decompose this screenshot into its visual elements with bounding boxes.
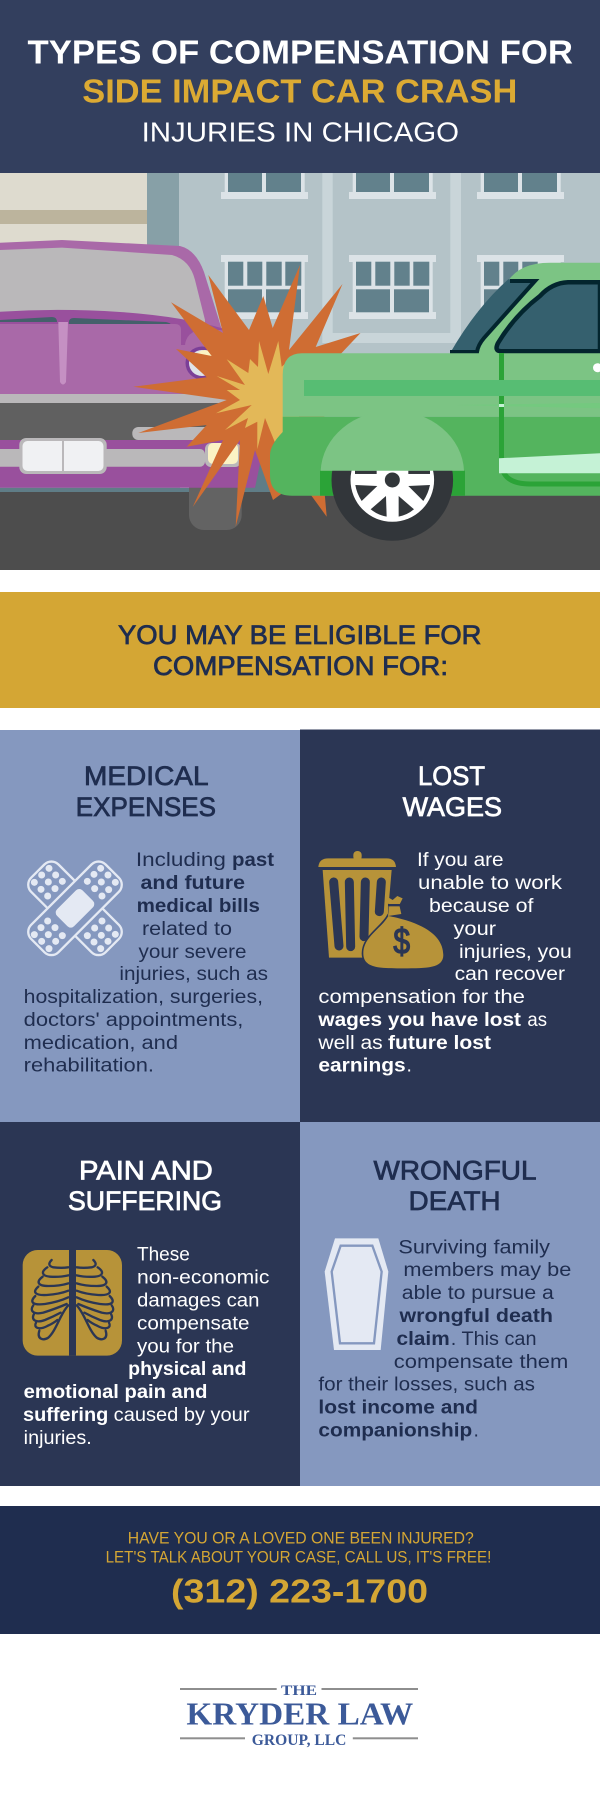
text: wrongful death: lost income and <box>318 1398 478 1419</box>
icon: rib cage <box>23 1250 122 1356</box>
building background <box>0 173 600 570</box>
call to action panel <box>0 1506 600 1634</box>
banner: you may be eligible: YOU MAY BE ELIGIBLE FOR <box>118 620 482 650</box>
heading: medical expenses: EXPENSES <box>76 792 216 822</box>
icon: crossed bandages <box>24 857 126 959</box>
logo: the kryder law group: THE <box>281 1683 317 1699</box>
text: lost wages: your <box>454 919 497 940</box>
text: medical expenses: Including <box>136 850 226 871</box>
text: medical expenses <box>24 850 275 1076</box>
text: lost wages: well as <box>317 1033 383 1054</box>
text: lost wages: injuries, you <box>459 942 572 963</box>
text: wrongful death: claim <box>396 1329 450 1350</box>
purple car <box>0 240 290 530</box>
banner: you may be eligible <box>0 592 600 708</box>
text: lost wages: wages you have lost <box>317 1010 522 1031</box>
icon: trash can and money bag: $ <box>393 920 410 961</box>
text: medical expenses: past <box>232 850 275 871</box>
text: lost wages: because of <box>429 896 534 917</box>
text: pain and suffering: caused by your <box>114 1405 250 1426</box>
text: medical expenses: medication, and <box>24 1033 178 1054</box>
text: lost wages: . <box>406 1056 412 1076</box>
icon: coffin <box>325 1238 388 1350</box>
header panel <box>0 0 600 173</box>
text: wrongful death: members may be <box>403 1260 571 1281</box>
title <box>28 34 573 148</box>
text: wrongful death: Surviving family <box>398 1237 550 1258</box>
text: pain and suffering: you for the <box>137 1336 234 1357</box>
text: lost wages: as <box>527 1010 547 1031</box>
heading: medical expenses <box>76 761 216 822</box>
title: SIDE IMPACT CAR CRASH <box>82 72 517 110</box>
heading: lost wages: LOST <box>418 761 485 791</box>
text: pain and suffering: emotional pain and <box>24 1382 207 1403</box>
text: lost wages: future lost <box>388 1033 492 1054</box>
text: pain and suffering: compensate <box>137 1313 250 1334</box>
text: wrongful death: for their losses, such as <box>318 1375 535 1396</box>
title: INJURIES IN CHICAGO <box>142 117 459 148</box>
icon: trash can and money bag <box>318 851 443 968</box>
text: wrongful death <box>318 1237 571 1442</box>
text: medical expenses: medical bills <box>137 896 260 917</box>
text: medical expenses: injuries, such as <box>119 964 268 985</box>
wheel <box>320 419 465 541</box>
panel: wrongful death <box>300 1122 600 1486</box>
panel: lost wages <box>300 730 600 1122</box>
text: wrongful death: . This can <box>451 1329 536 1350</box>
text: lost wages: compensation for the <box>318 987 525 1008</box>
windows: upper row <box>221 173 564 199</box>
text: pain and suffering: physical and <box>128 1359 246 1380</box>
heading: wrongful death: DEATH <box>409 1186 501 1216</box>
windows: lower row <box>221 255 564 319</box>
heading: lost wages <box>403 761 502 822</box>
panel: pain and suffering <box>0 1122 300 1486</box>
text: lost wages: earnings <box>318 1056 406 1076</box>
heading: medical expenses: MEDICAL <box>84 761 209 791</box>
call to action panel: HAVE YOU OR A LOVED ONE BEEN INJURED? <box>128 1529 474 1547</box>
text: medical expenses: your severe <box>138 942 246 963</box>
text: medical expenses: hospitalization, surgeries, <box>24 987 263 1008</box>
text: medical expenses: rehabilitation. <box>24 1056 154 1076</box>
text: pain and suffering: injuries. <box>24 1428 92 1449</box>
heading: wrongful death <box>374 1155 536 1216</box>
text: lost wages: If you are <box>417 850 504 871</box>
panel: medical expenses <box>0 730 300 1122</box>
text: lost wages <box>317 850 572 1076</box>
explosion <box>133 265 360 527</box>
text: wrongful death: wrongful death <box>398 1306 553 1327</box>
text: pain and suffering <box>23 1245 270 1449</box>
text: medical expenses: doctors' appointments, <box>24 1010 243 1031</box>
heading: pain and suffering: SUFFERING <box>68 1186 222 1216</box>
text: lost wages: can recover <box>455 964 566 985</box>
road <box>0 492 600 570</box>
text: medical expenses: and future <box>140 873 245 894</box>
text: wrongful death: compensate them <box>394 1352 568 1373</box>
title: TYPES OF COMPENSATION FOR <box>28 34 573 71</box>
text: medical expenses: related to <box>142 919 232 940</box>
text: lost wages: unable to work <box>418 873 562 894</box>
heading: lost wages: WAGES <box>403 792 502 822</box>
text: pain and suffering: suffering <box>23 1405 108 1426</box>
text: wrongful death: . <box>474 1420 479 1442</box>
phone number: (312) 223-1700 <box>171 1573 428 1610</box>
text: pain and suffering: non-economic <box>137 1268 270 1289</box>
heading: pain and suffering: PAIN AND <box>79 1155 213 1185</box>
text: wrongful death: able to pursue a <box>402 1283 554 1304</box>
heading: wrongful death: WRONGFUL <box>374 1155 536 1185</box>
logo: the kryder law group: GROUP, LLC <box>252 1732 346 1749</box>
logo: the kryder law group: KRYDER LAW <box>186 1696 413 1732</box>
banner: you may be eligible: COMPENSATION FOR: <box>153 651 448 681</box>
text: wrongful death: companionship <box>318 1420 472 1442</box>
call to action panel: LET'S TALK ABOUT YOUR CASE, CALL US, IT'S FREE! <box>106 1548 491 1566</box>
heading: pain and suffering <box>68 1155 222 1216</box>
green car <box>270 263 600 541</box>
text: pain and suffering: damages can <box>137 1290 260 1312</box>
text: pain and suffering: These <box>137 1245 190 1266</box>
logo: the kryder law group <box>180 1683 418 1749</box>
